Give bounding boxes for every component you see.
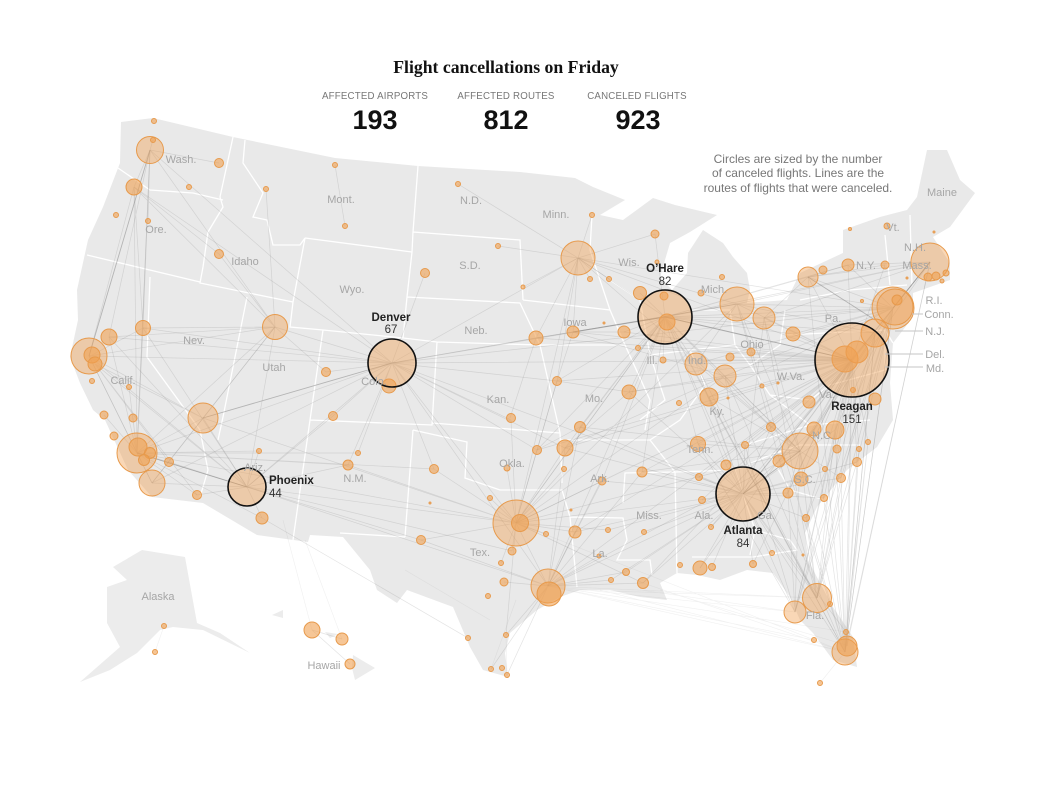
hub: Atlanta circle <box>716 467 770 521</box>
label: Denver 67: 67 <box>385 324 397 336</box>
state labels: Va. <box>819 389 835 401</box>
leader lines for northeast labels <box>885 314 923 367</box>
hub: Phoenix circle <box>228 468 266 506</box>
large airport circles <box>71 136 949 665</box>
routes from west coast hubs <box>89 150 434 518</box>
label: Atlanta 84: Atlanta <box>724 525 763 537</box>
state labels: Conn. <box>924 309 954 321</box>
routes from O'Hare <box>516 234 848 652</box>
state labels: N.C. <box>812 430 834 442</box>
stat: affected airports <box>322 91 428 135</box>
state labels: Wis. <box>618 257 640 269</box>
medium and small airport circles <box>84 118 949 686</box>
state labels: Ark. <box>590 473 610 485</box>
state labels: Neb. <box>464 325 488 337</box>
state labels: Tenn. <box>687 444 713 456</box>
label: Denver 67: Denver <box>372 312 411 324</box>
Alaska landmass <box>80 550 250 682</box>
routes along the east and midwest <box>392 215 930 652</box>
state labels: Ga. <box>757 510 775 522</box>
label: Reagan 151: 151 <box>842 414 862 426</box>
stat: canceled flights: 923 <box>615 105 661 135</box>
routes from Atlanta <box>516 318 857 652</box>
state labels: N.H. <box>904 242 926 254</box>
Hawaii islands <box>272 610 375 680</box>
routes from Dallas and Houston <box>137 258 800 635</box>
state labels: Mo. <box>585 393 603 405</box>
state labels: Ore. <box>145 224 167 236</box>
hub: Reagan circle <box>815 323 889 397</box>
state labels: R.I. <box>925 295 943 307</box>
state labels: Ky. <box>709 406 725 418</box>
airports sized by canceled flights <box>71 118 949 686</box>
stat: affected airports: 193 <box>352 105 398 135</box>
explanatory note <box>704 152 892 195</box>
contiguous states landmass <box>70 118 975 677</box>
state labels: Vt. <box>886 222 900 234</box>
stat: affected routes: AFFECTED ROUTES <box>457 91 555 102</box>
state labels: Alaska <box>141 591 175 603</box>
stat: affected routes: 812 <box>483 105 529 135</box>
explanatory note: Circles are sized by the number <box>714 152 882 166</box>
explanatory note: routes of flights that were canceled. <box>704 181 892 195</box>
state labels: Minn. <box>543 209 569 221</box>
state labels: S.D. <box>459 260 481 272</box>
stat: affected airports: AFFECTED AIRPORTS <box>322 91 428 102</box>
label: Reagan 151: Reagan <box>831 401 873 413</box>
state labels: Calif. <box>110 375 136 387</box>
label: Phoenix 44: 44 <box>269 488 282 500</box>
routes from New York area <box>392 258 930 652</box>
label: Reagan 151 <box>831 401 873 426</box>
state labels: Colo. <box>361 376 387 388</box>
state labels: Tex. <box>470 547 490 559</box>
state labels: Ind. <box>688 355 706 367</box>
state labels: N.J. <box>925 326 945 338</box>
state labels: Ohio <box>740 339 764 351</box>
heavier routes <box>89 150 930 494</box>
state labels: Okla. <box>499 458 525 470</box>
label: Phoenix 44 <box>269 475 314 500</box>
state labels: Kan. <box>487 394 509 406</box>
state labels: Pa. <box>825 313 841 325</box>
routes from Denver <box>89 150 743 586</box>
state labels: Nev. <box>183 335 205 347</box>
title: Flight cancellations on Friday <box>393 57 619 77</box>
label: Phoenix 44: Phoenix <box>269 475 314 487</box>
state labels: Ill. <box>646 355 658 367</box>
hub: O'Hare circle <box>638 290 692 344</box>
stat: affected routes <box>457 91 555 135</box>
label: Atlanta 84: 84 <box>737 538 750 550</box>
routes from Reagan <box>392 258 930 652</box>
stat: canceled flights <box>587 91 687 135</box>
label: O'Hare 82: O’Hare <box>646 263 684 275</box>
state labels: Mont. <box>327 194 355 206</box>
state labels: Maine <box>927 187 957 199</box>
map of the United States <box>70 118 975 682</box>
state labels: S.C. <box>794 474 816 486</box>
label: Denver 67 <box>372 312 411 336</box>
state labels: Mass. <box>902 260 932 272</box>
state labels: N.D. <box>460 195 482 207</box>
stat: canceled flights: CANCELED FLIGHTS <box>587 91 687 102</box>
label: O'Hare 82: 82 <box>659 276 671 288</box>
state labels: Wyo. <box>340 284 364 296</box>
state labels: Fla. <box>806 610 824 622</box>
state labels: N.M. <box>343 473 367 485</box>
explanatory note: of canceled flights. Lines are the <box>712 166 884 180</box>
state borders <box>87 137 912 587</box>
state labels: Ariz. <box>244 462 266 474</box>
state labels: Miss. <box>636 510 662 522</box>
state labels: Ala. <box>695 510 713 522</box>
state labels: La. <box>592 548 608 560</box>
flight route lines <box>89 140 930 683</box>
state labels: Idaho <box>231 256 259 268</box>
state labels: Iowa <box>563 317 587 329</box>
label: Atlanta 84 <box>724 525 763 550</box>
state labels: Del. <box>925 349 945 361</box>
state labels: Utah <box>262 362 286 374</box>
hub: Denver circle <box>368 339 416 387</box>
label: O'Hare 82 <box>646 263 684 288</box>
state labels: W.Va. <box>777 371 805 383</box>
state labels <box>110 154 957 672</box>
state labels: Mich. <box>701 284 727 296</box>
state labels: N.Y. <box>856 260 876 272</box>
state labels: Wash. <box>166 154 196 166</box>
state labels: Hawaii <box>307 660 341 672</box>
state labels: Md. <box>926 363 944 375</box>
